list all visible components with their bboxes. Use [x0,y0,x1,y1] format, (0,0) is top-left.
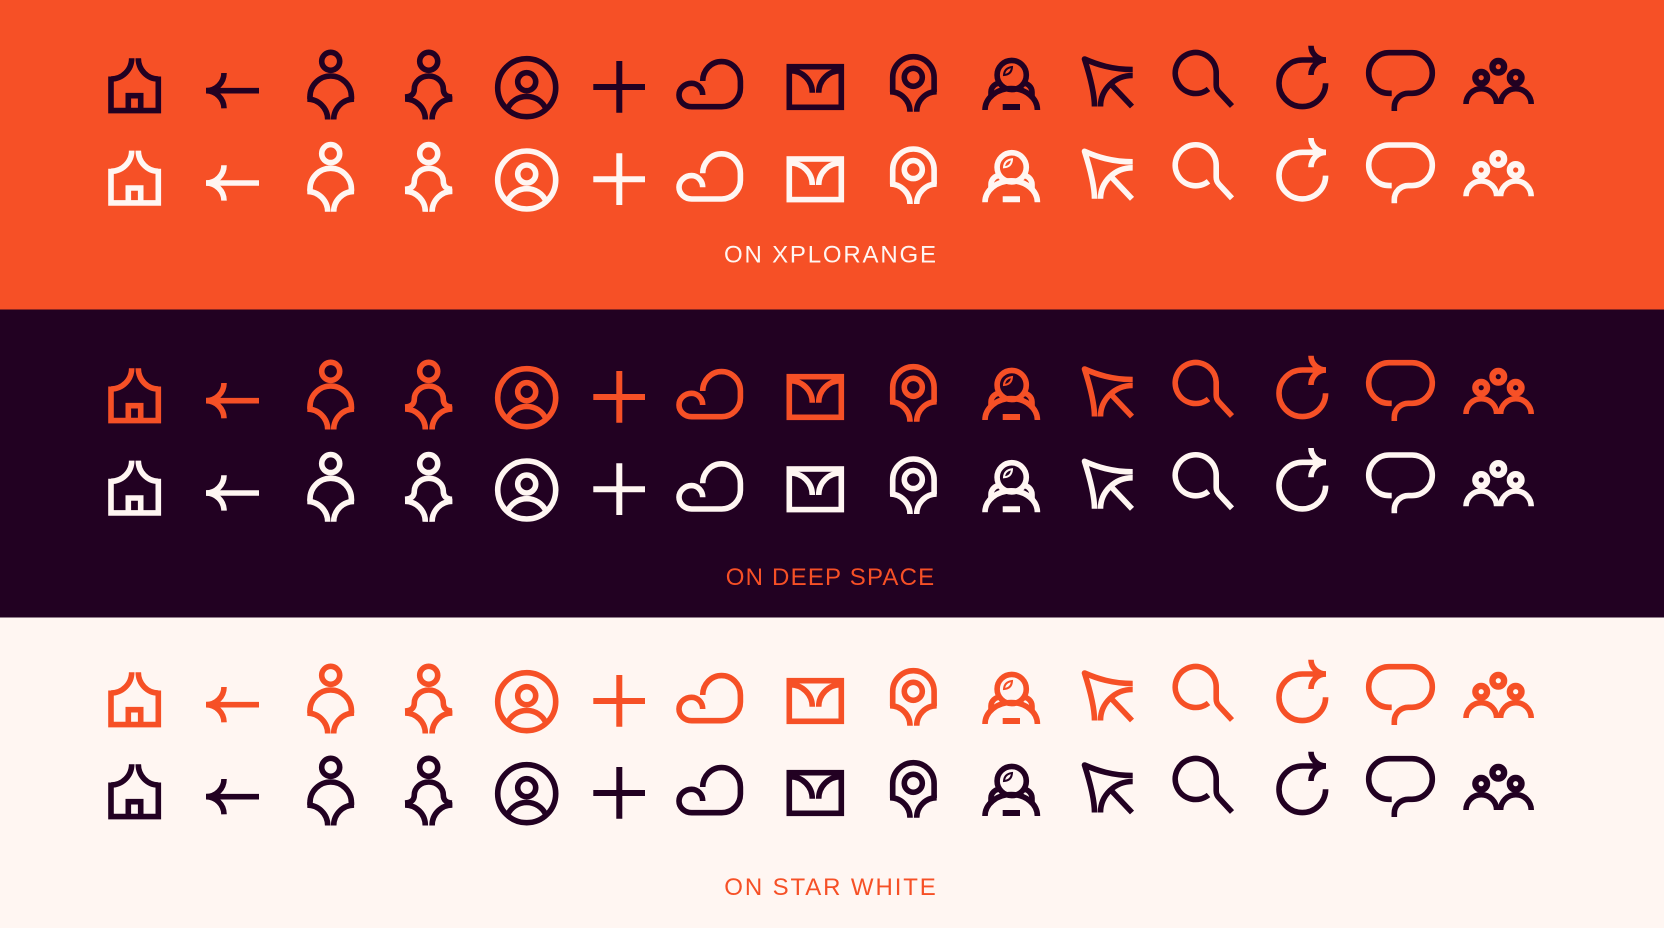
panel: on deep space [0,310,1664,618]
icon: pin [890,671,937,726]
icon: profile [498,59,556,117]
icon: pin [890,367,937,422]
icon: person alt [405,758,452,826]
icon: cloud [679,62,740,107]
icon: astronaut [985,60,1037,110]
icon: pin [890,459,937,514]
icon: arrow [206,475,259,511]
icon: refresh [1279,356,1326,417]
icon: chat [1369,667,1432,725]
icon: cloud [679,154,740,199]
label: on star white: ON STAR WHITE [724,874,936,901]
icon: chat [1369,53,1432,111]
icon row: deep space on star white [111,752,1531,826]
icon: home [111,58,158,111]
icon: person [307,758,354,826]
icon: home [111,461,158,513]
icon row: star white on deep space [111,448,1531,522]
icon: arrow [206,383,259,418]
icon: refresh [1279,46,1326,107]
icon: person alt [405,666,452,734]
icon: profile [498,673,556,731]
icon: refresh [1279,138,1326,199]
icon: profile [498,369,556,427]
icon: cursor [1084,765,1133,812]
icon: mail [789,773,841,813]
icon: astronaut [985,674,1037,724]
icon: profile [498,461,556,519]
icon: home [111,764,158,817]
panel: on star white [0,618,1664,928]
icon row: deep space on orange [111,46,1531,120]
icon: group [1466,767,1531,810]
icon: mail [789,67,841,107]
icon: search [1175,145,1232,198]
icon: person [307,455,354,522]
icon: astronaut [985,153,1037,202]
icon: search [1175,362,1232,416]
icon: arrow [206,73,259,108]
icon: chat [1369,455,1432,513]
icon: astronaut [985,370,1037,420]
icon: person [307,666,354,734]
icon: mail [789,469,841,510]
icon: cursor [1084,369,1133,416]
icon: group [1466,371,1531,414]
icon: search [1175,666,1232,720]
icon: mail [789,377,841,417]
icon: chat [1369,363,1432,421]
icon: arrow [206,687,259,722]
icon: plus [593,767,645,819]
icon: person alt [405,455,452,522]
panel: on xplorange [0,0,1664,310]
icon: cursor [1084,151,1133,199]
icon: cursor [1084,673,1133,720]
icon: refresh [1279,660,1326,721]
icon row: orange on star white [111,660,1531,734]
icon: search [1175,758,1232,812]
icon: plus [593,153,645,205]
icon: person alt [405,362,452,430]
icon row: orange on deep space [111,356,1531,430]
icon: refresh [1279,752,1326,813]
icon: mail [789,159,841,200]
icon: home [111,672,158,725]
icon row: star white on orange [111,138,1531,212]
icon: person [307,145,354,212]
icon: arrow [206,779,259,814]
icon: cloud [679,464,740,509]
icon: cloud [679,676,740,721]
icon: mail [789,681,841,721]
icon: group [1466,61,1531,104]
icon: chat [1369,759,1432,817]
icon: refresh [1279,448,1326,509]
icon: profile [498,765,556,823]
icon: home [111,151,158,203]
icon: search [1175,455,1232,508]
icon: group [1466,463,1531,506]
icon: person [307,52,354,119]
icon: pin [890,149,937,204]
icon: search [1175,52,1232,106]
icon: person alt [405,145,452,212]
icon: cloud [679,768,740,813]
icon: pin [890,763,937,818]
label: on xplorange: ON XPLORANGE [724,242,936,269]
icon: group [1466,675,1531,718]
icon: astronaut [985,766,1037,816]
icon: cursor [1084,461,1133,509]
icon: group [1466,153,1531,196]
icon: chat [1369,145,1432,203]
icon: plus [593,675,645,727]
icon: astronaut [985,463,1037,512]
icon: arrow [206,165,259,201]
icon: plus [593,463,645,515]
icon: profile [498,151,556,209]
icon: plus [593,61,645,113]
icon: pin [890,57,937,112]
icon: cursor [1084,59,1133,106]
label: on deep space: ON DEEP SPACE [726,564,934,591]
icon: cloud [679,372,740,417]
icon: plus [593,371,645,423]
icon: person [307,362,354,430]
icon: person alt [405,52,452,119]
icon: home [111,368,158,421]
